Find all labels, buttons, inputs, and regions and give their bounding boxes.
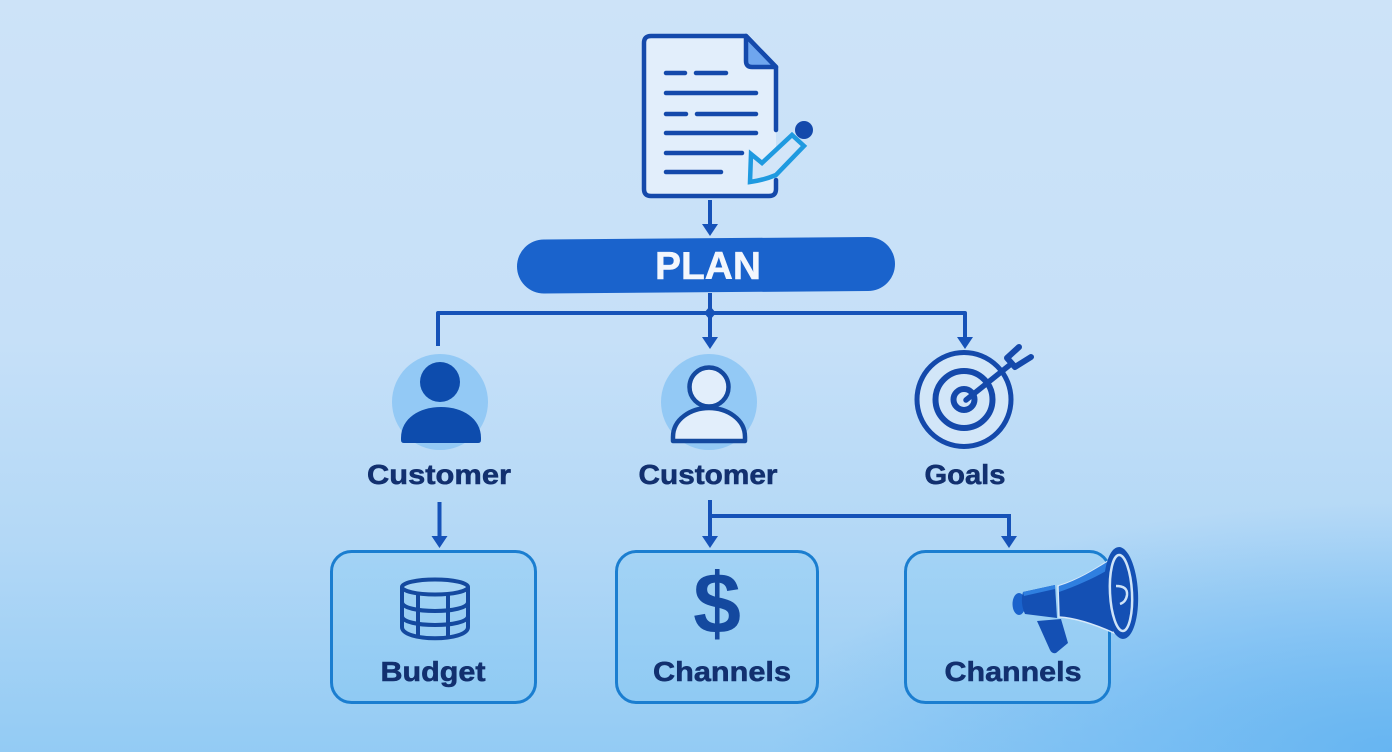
panel: channels with megaphone [906, 552, 1110, 702]
folded corner [746, 36, 776, 67]
arrow: document to plan [702, 200, 718, 236]
label: goals: Goals [924, 459, 1006, 490]
icon: goals target [917, 347, 1031, 446]
label: customer center: Customer [638, 459, 778, 490]
document sheet [644, 36, 776, 196]
connector: customer to channels [702, 500, 1017, 548]
document text lines [666, 73, 756, 172]
bell detail [1116, 586, 1127, 604]
icon: document with check mark [644, 36, 813, 196]
icon: database [402, 580, 468, 638]
panel: budget [332, 552, 536, 702]
document outline [644, 36, 776, 196]
channels label: Channels [944, 656, 1082, 687]
horn highlight [1059, 562, 1107, 592]
label: customer left: Customer [367, 459, 511, 490]
icon: dollar sign: $ [693, 556, 741, 652]
arrow: customer to budget [432, 502, 448, 548]
plan pill [517, 237, 895, 294]
channels label: Channels [653, 656, 791, 687]
connector: plan to second row [438, 293, 973, 349]
bell inner ring [1108, 554, 1134, 632]
icon: megaphone [1012, 546, 1140, 653]
megaphone body [1022, 585, 1057, 618]
icon: customer outline [661, 354, 757, 450]
pencil dot [795, 121, 813, 139]
megaphone horn [1058, 561, 1114, 633]
panel: channels with dollar [616, 552, 818, 702]
icon: customer solid [392, 354, 488, 450]
megaphone back cap [1012, 593, 1026, 615]
check pencil [750, 135, 804, 182]
body highlight [1023, 585, 1055, 596]
megaphone bell [1102, 546, 1140, 640]
budget label: Budget [380, 656, 486, 687]
plan label: PLAN [655, 245, 761, 288]
megaphone handle [1037, 619, 1068, 653]
